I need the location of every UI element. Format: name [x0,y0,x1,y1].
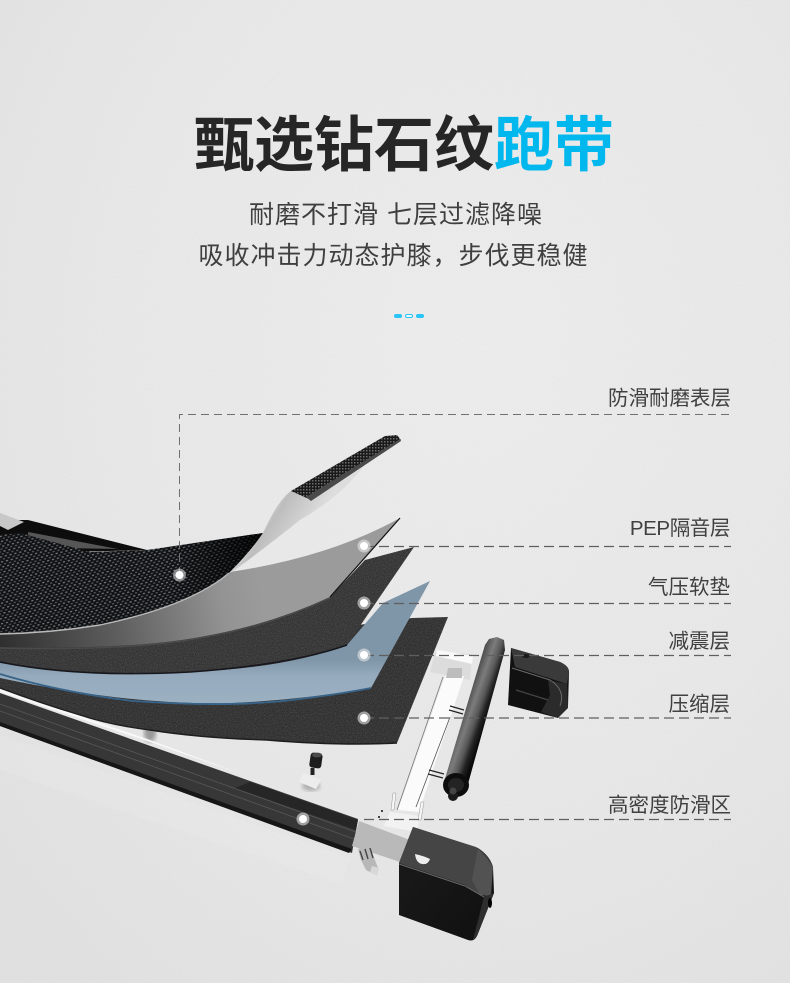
subtitle: 耐磨不打滑 七层过滤降噪 [249,201,543,229]
layer: air cushion [0,547,414,674]
leader lines: layers [364,546,731,820]
small metal clip [358,847,379,876]
layer labels: 减震层 [668,630,730,653]
soft shadow of layer [144,724,156,742]
textured top strip [291,435,401,500]
black side frame [0,520,147,552]
silver corner block [352,821,410,862]
layer labels: PEP隔音层 [630,517,730,540]
dark rail [0,693,358,853]
carbon surface [0,533,263,633]
layer: PEP sound insulation [0,518,400,649]
layer: top surface with curl [0,435,401,634]
screw on rail [299,752,323,791]
pagination dots [394,314,424,318]
roller bracket [508,648,569,718]
leader line: anti-slip surface [180,414,731,575]
pale reflection below rail [0,735,350,885]
layer: compression layer [0,617,448,744]
layer labels: 高密度防滑区 [608,794,731,817]
subtitle: 吸收冲击力动态护膝，步伐更稳健 [198,242,589,270]
layer labels: 气压软垫 [648,576,730,599]
subtitle [198,201,589,270]
lower rail assembly [0,688,410,885]
silver side strip [0,690,397,834]
title: 甄选钻石纹跑带 [194,112,614,179]
layer labels: 压缩层 [668,693,730,716]
layer labels [608,387,731,817]
rail end cap [399,827,494,940]
marker dots [173,540,370,826]
layer: shock absorbing layer [0,581,430,704]
layer labels: 防滑耐磨表层 [608,387,731,410]
curled underside [229,467,363,573]
white frame [378,650,473,832]
roller [443,637,505,801]
